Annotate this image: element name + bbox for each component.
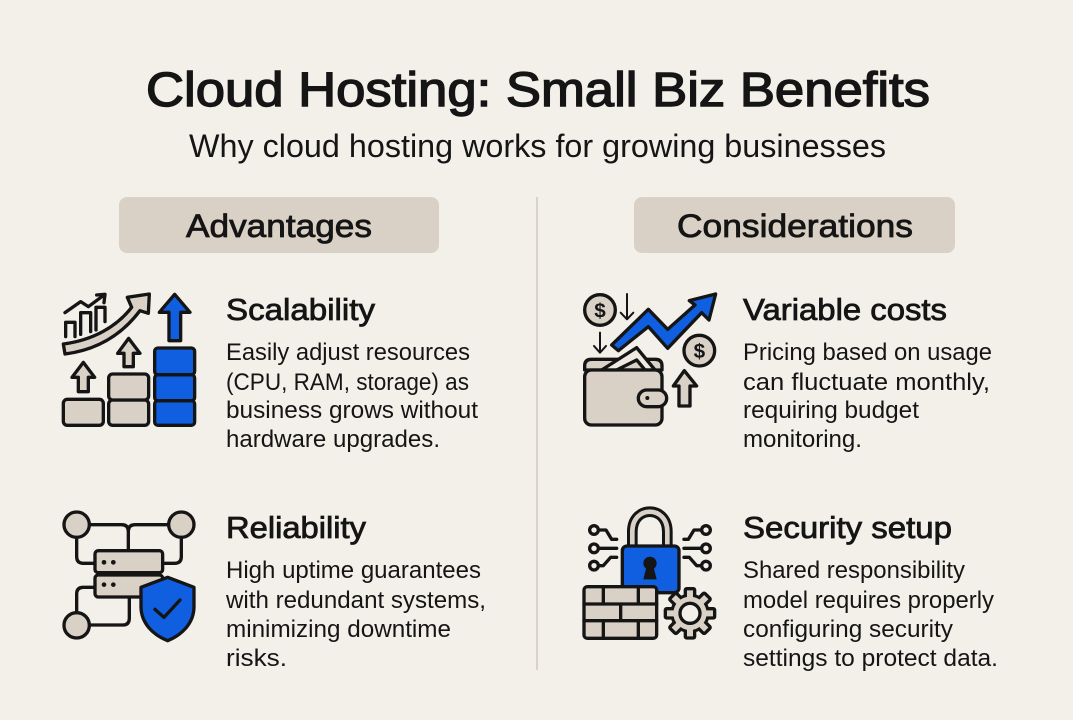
icon: scalability: [63, 294, 195, 425]
icon: security setup: [584, 512, 715, 638]
text: scalability: Scalability: [226, 292, 376, 327]
heading: advantages: [119, 197, 439, 253]
text: security setup: [743, 510, 998, 672]
text: security setup: Shared responsibility: [743, 557, 965, 584]
text: scalability: (CPU, RAM, storage) as: [226, 369, 469, 396]
text: reliability: risks.: [226, 645, 287, 672]
text: reliability: [225, 510, 486, 672]
text: security setup: configuring security: [743, 616, 953, 643]
text: reliability: minimizing downtime: [226, 616, 451, 643]
text: scalability: business grows without: [226, 397, 478, 424]
subtitle: Why cloud hosting works for growing businesses: [189, 128, 886, 164]
text: variable costs: [743, 292, 992, 453]
text: scalability: hardware upgrades.: [226, 426, 440, 453]
text: security setup: Security setup: [743, 510, 952, 545]
text: variable costs: Variable costs: [743, 292, 947, 327]
text: security setup: model requires properly: [743, 587, 994, 614]
text: reliability: with redundant systems,: [225, 587, 486, 614]
text: scalability: [226, 292, 478, 453]
panel: advantages: [63, 197, 486, 672]
text: variable costs: requiring budget: [743, 397, 919, 424]
text: variable costs: can fluctuate monthly,: [743, 369, 990, 396]
text: reliability: Reliability: [226, 510, 367, 545]
text: variable costs: monitoring.: [743, 426, 862, 453]
icon: reliability: [64, 512, 194, 641]
icon: variable costs: $: [594, 299, 606, 322]
text: reliability: High uptime guarantees: [226, 557, 481, 584]
text: scalability: Easily adjust resources: [226, 339, 470, 366]
icon: variable costs: $: [694, 340, 706, 363]
title: Cloud Hosting: Small Biz Benefits: [146, 64, 930, 117]
text: variable costs: Pricing based on usage: [743, 339, 992, 366]
heading: considerations: [634, 197, 955, 253]
panel: considerations: [584, 197, 998, 672]
text: security setup: settings to protect data.: [743, 645, 998, 672]
icon: variable costs: [585, 294, 716, 425]
heading: advantages: Advantages: [186, 208, 372, 244]
heading: considerations: Considerations: [677, 208, 913, 244]
